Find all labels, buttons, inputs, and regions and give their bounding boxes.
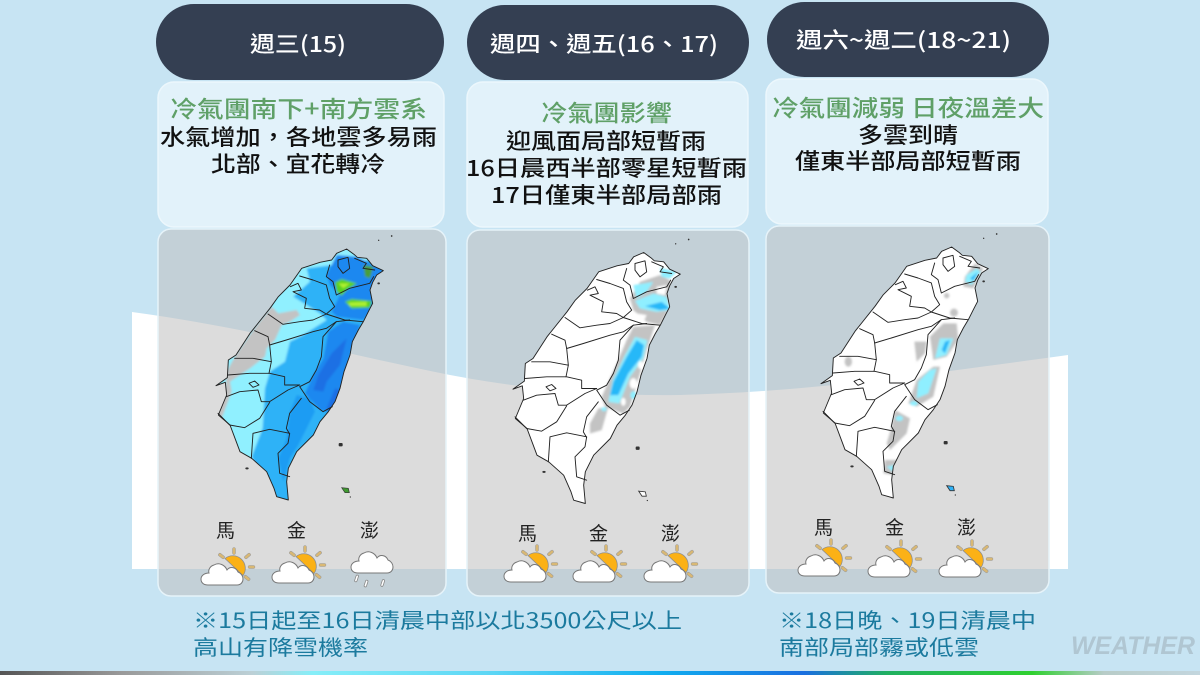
note: snow on high mountains: ※15日起至16日清晨中部以北3500公尺以上 [193, 605, 682, 635]
white wave band [132, 312, 1068, 569]
column 2 description box: 迎風面局部短暫雨 [506, 124, 706, 156]
bottom color bar [0, 671, 1200, 675]
panel: Thursday-Friday rain map [467, 230, 749, 596]
label: Penghu: 澎 [661, 519, 680, 546]
panel: Saturday-Tuesday rain map [766, 226, 1049, 593]
column 2 description box [466, 82, 748, 227]
column 1 header pill: 週三(15) [250, 27, 346, 59]
icon: Matsu partly cloudy [201, 548, 255, 585]
column 3 description box [766, 79, 1048, 224]
icon: Penghu partly cloudy [939, 540, 993, 577]
column 3 header pill [767, 2, 1049, 77]
note: snow on high mountains [193, 605, 682, 662]
column 1 description box: 北部、宜花轉冷 [211, 147, 385, 179]
label: Penghu: 澎 [360, 516, 379, 543]
label: Matsu: 馬 [814, 513, 833, 540]
note: fog or low clouds in the south [779, 605, 1036, 662]
column 2 header pill [467, 5, 749, 80]
icon: Penghu partly cloudy [644, 544, 698, 582]
column 1 description box [158, 82, 444, 227]
rainfall map of Taiwan, Thursday-Friday [513, 239, 689, 503]
column 1 description box: 冷氣團南下+南方雲系 [170, 90, 427, 124]
icon: Penghu rain [351, 552, 393, 587]
note: snow on high mountains: 高山有降雪機率 [193, 632, 368, 662]
rainfall map of Taiwan, Wednesday [216, 235, 392, 500]
label: Matsu: 馬 [216, 516, 235, 543]
label: Penghu: 澎 [957, 513, 976, 540]
icon: Kinmen partly cloudy [573, 544, 627, 582]
label: Kinmen: 金 [885, 513, 904, 540]
column 3 description box: 多雲到晴 [858, 118, 958, 150]
rainfall map of Taiwan, Saturday-Tuesday [821, 233, 997, 498]
column 2 header pill: 週四、週五(16、17) [490, 27, 718, 59]
column 2 description box: 17日僅東半部局部雨 [491, 178, 722, 210]
column 2 description box: 冷氣團影響 [541, 94, 672, 128]
column 1 header pill [156, 4, 444, 80]
icon: Kinmen partly cloudy [272, 546, 326, 583]
icon: Matsu partly cloudy [504, 544, 558, 582]
label: Kinmen: 金 [589, 519, 608, 546]
icon: Matsu partly cloudy [798, 538, 852, 576]
label: Kinmen: 金 [287, 516, 306, 543]
watermark: WEATHER [1071, 632, 1195, 660]
column 3 description box: 僅東半部局部短暫雨 [795, 144, 1021, 176]
note: fog or low clouds in the south: ※18日晚、19日清晨中 [779, 605, 1036, 635]
column 3 description box: 冷氣團減弱 日夜溫差大 [772, 89, 1044, 123]
column 1 description box: 水氣增加，各地雲多易雨 [160, 120, 437, 152]
label: Matsu: 馬 [518, 519, 537, 546]
note: fog or low clouds in the south: 南部局部霧或低雲 [779, 632, 979, 662]
panel: Wednesday rain map [158, 229, 446, 596]
column 3 header pill: 週六~週二(18~21) [796, 23, 1011, 55]
column 2 description box: 16日晨西半部零星短暫雨 [466, 151, 747, 183]
icon: Kinmen partly cloudy [868, 540, 922, 577]
